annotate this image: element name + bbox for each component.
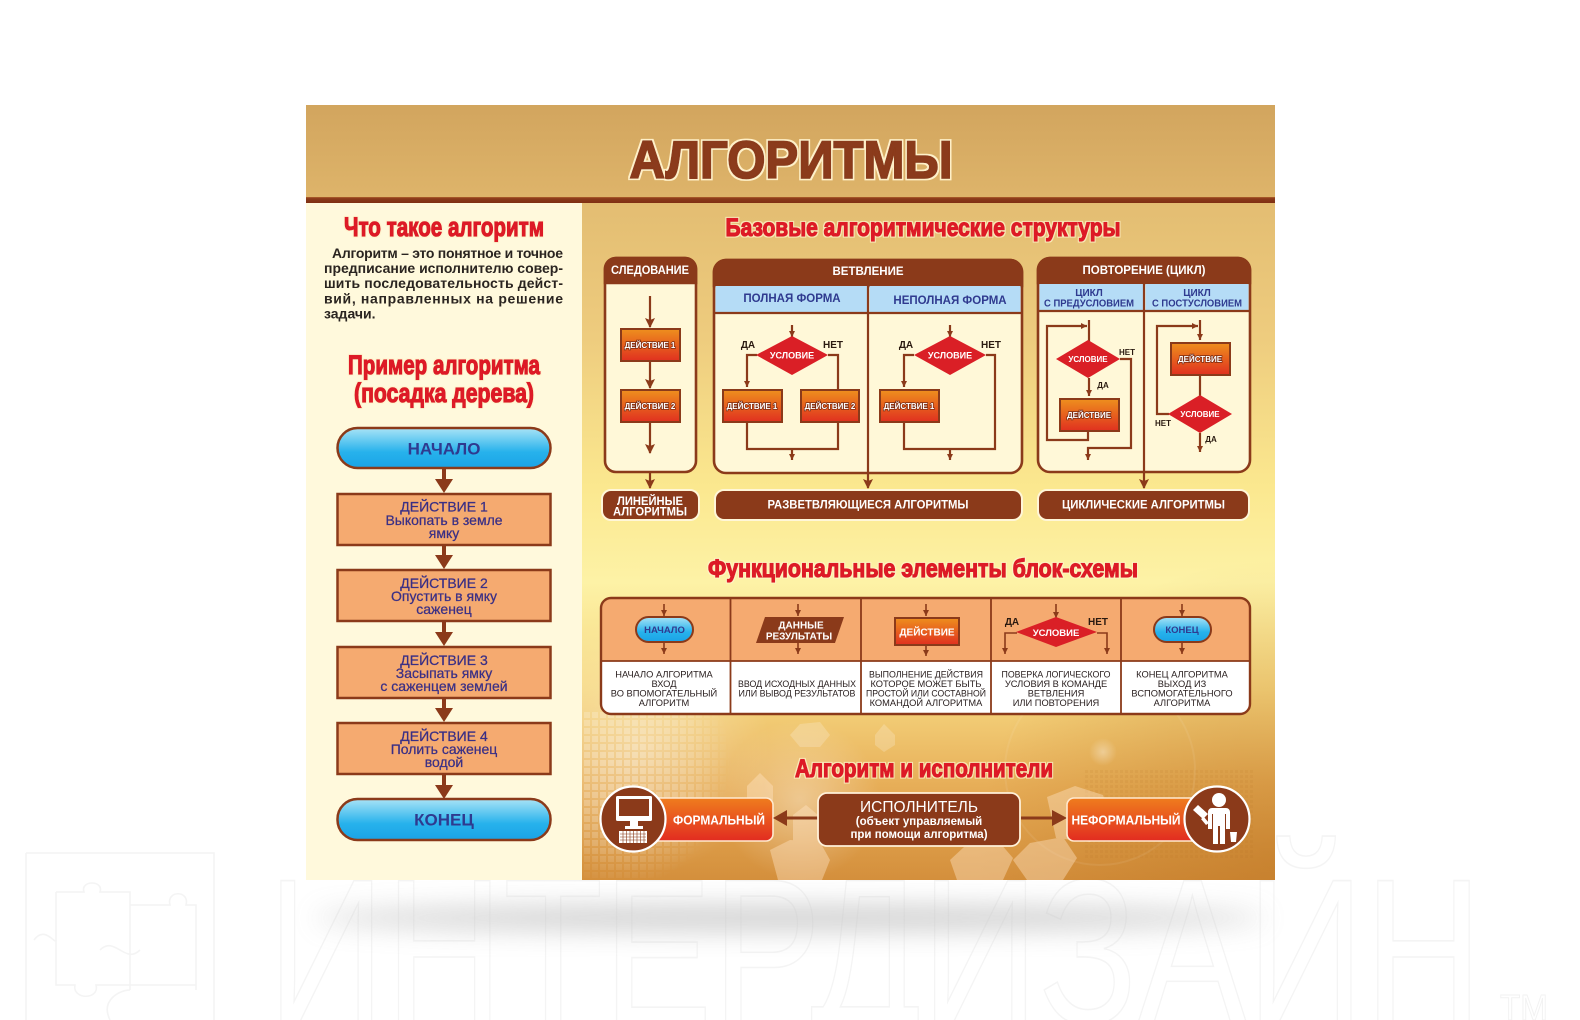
element: condition: ИЛИ ПОВТОРЕНИЯ xyxy=(1013,698,1099,708)
heading: what is an algorithm: Что такое алгоритм xyxy=(344,212,544,242)
label: cyclic algorithms: ЦИКЛИЧЕСКИЕ АЛГОРИТМЫ xyxy=(1062,498,1225,512)
definition text xyxy=(324,245,563,322)
shadow under poster xyxy=(315,905,1265,931)
title: АЛГОРИТМЫ xyxy=(630,131,952,190)
definition text: шить последовательность дейст- xyxy=(324,275,563,291)
partial form column: ДЕЙСТВИЕ 1 xyxy=(884,402,935,411)
informal executor: НЕФОРМАЛЬНЫЙ xyxy=(1072,812,1180,828)
arrow: to formal xyxy=(773,810,818,826)
step 3: Засыпать ямку xyxy=(396,665,492,681)
element: start: АЛГОРИТМ xyxy=(639,698,689,708)
step 3 xyxy=(338,647,550,698)
definition text: предписание исполнителю совер- xyxy=(324,260,563,276)
step 4: Полить саженец xyxy=(391,741,497,757)
icon: computer xyxy=(616,796,652,843)
step 2: Опустить в ямку xyxy=(391,588,497,604)
panel: sequence xyxy=(605,258,696,472)
end terminator xyxy=(338,799,550,840)
pre-condition loop: С ПРЕДУСЛОВИЕМ xyxy=(1044,298,1134,310)
element: action: ПРОСТОЙ ИЛИ СОСТАВНОЙ xyxy=(866,688,986,698)
element: start: НАЧАЛО АЛГОРИТМА xyxy=(615,670,714,680)
pre-condition loop: УСЛОВИЕ xyxy=(1068,355,1108,364)
full form column xyxy=(716,286,868,460)
element: data: РЕЗУЛЬТАТЫ xyxy=(766,632,832,642)
definition text: задачи. xyxy=(324,306,376,322)
heading: basic structures: Базовые алгоритмические структуры xyxy=(726,214,1120,242)
arrow: to informal xyxy=(1021,810,1067,826)
element: condition: УСЛОВИЕ xyxy=(1033,628,1079,639)
header stripe xyxy=(306,197,1275,203)
element: condition: ВЕТВЛЕНИЯ xyxy=(1028,688,1084,698)
partial form column: УСЛОВИЕ xyxy=(928,350,972,360)
pre-condition loop xyxy=(1040,284,1144,460)
step 2: саженец xyxy=(416,601,472,617)
element: data xyxy=(738,604,856,698)
step 2: ДЕЙСТВИЕ 2 xyxy=(400,574,488,591)
panel: repetition: ПОВТОРЕНИЕ (ЦИКЛ) xyxy=(1083,265,1206,277)
element: action: КОМАНДОЙ АЛГОРИТМА xyxy=(870,697,983,708)
panel: branching: ВЕТВЛЕНИЕ xyxy=(832,266,904,278)
watermark: puzzle logo xyxy=(26,853,214,1020)
post-condition loop: ДА xyxy=(1205,435,1217,444)
arrow: sequence to linear xyxy=(649,472,651,488)
executor box: при помощи алгоритма) xyxy=(850,829,988,841)
start terminator: НАЧАЛО xyxy=(408,440,480,458)
label: branching algorithms: РАЗВЕТВЛЯЮЩИЕСЯ АЛГОРИТМЫ xyxy=(768,498,968,512)
element: action: КОТОРОЕ МОЖЕТ БЫТЬ xyxy=(871,679,981,689)
element: end: АЛГОРИТМА xyxy=(1154,698,1211,708)
partial form column: НЕПОЛНАЯ ФОРМА xyxy=(893,295,1007,307)
step 1: ДЕЙСТВИЕ 1 xyxy=(400,498,488,514)
label: branching algorithms xyxy=(715,490,1022,520)
element: end: КОНЕЦ АЛГОРИТМА xyxy=(1136,670,1229,680)
executor box: (объект управляемый xyxy=(856,816,982,828)
element: action xyxy=(866,604,986,708)
full form column: НЕТ xyxy=(823,340,843,351)
panel: sequence: ДЕЙСТВИЕ 1 xyxy=(625,341,676,350)
pre-condition loop: ДЕЙСТВИЕ xyxy=(1067,411,1112,420)
post-condition loop: УСЛОВИЕ xyxy=(1180,410,1220,419)
element: condition: ДА xyxy=(1005,617,1019,628)
step 4: водой xyxy=(425,754,463,770)
step 3: с саженцем землей xyxy=(380,678,508,694)
element: end: КОНЕЦ xyxy=(1165,625,1199,636)
start terminator xyxy=(338,428,550,468)
full form column: ДА xyxy=(741,340,755,351)
heading: example algorithm xyxy=(348,350,541,408)
label: linear algorithms: ЛИНЕЙНЫЕ xyxy=(617,493,683,508)
element: condition: ПОВЕРКА ЛОГИЧЕСКОГО xyxy=(1002,670,1110,680)
definition text: вий, направленных на решение xyxy=(324,290,563,306)
post-condition loop: ДЕЙСТВИЕ xyxy=(1178,355,1223,364)
panel: repetition xyxy=(1038,258,1250,472)
post-condition loop: С ПОСТУСЛОВИЕМ xyxy=(1152,298,1242,310)
partial form column: ДА xyxy=(899,340,913,351)
full form column: УСЛОВИЕ xyxy=(770,350,814,360)
step 1: ямку xyxy=(429,525,459,541)
arrow: repetition to cyclic algorithms xyxy=(1143,284,1145,488)
element: start: ВХОД xyxy=(651,679,677,689)
table: functional elements xyxy=(601,598,1250,714)
executor box xyxy=(818,793,1020,846)
step 3: ДЕЙСТВИЕ 3 xyxy=(400,651,488,668)
element: condition: НЕТ xyxy=(1088,617,1108,628)
heading: example algorithm: Пример алгоритма xyxy=(348,350,541,380)
element: end: ВЫХОД ИЗ xyxy=(1158,679,1207,689)
flowchart: planting a tree xyxy=(338,428,550,840)
full form column: ДЕЙСТВИЕ 1 xyxy=(727,402,778,411)
step 4 xyxy=(338,723,550,774)
end terminator: КОНЕЦ xyxy=(414,810,474,830)
partial form column xyxy=(870,286,1020,460)
panel: branching xyxy=(714,260,1022,473)
element: start: НАЧАЛО xyxy=(644,625,685,636)
icon: person with tools xyxy=(1193,793,1237,844)
element: data: ИЛИ ВЫВОД РЕЗУЛЬТАТОВ xyxy=(738,688,856,698)
element: action: ДЕЙСТВИЕ xyxy=(899,626,955,638)
step 4: ДЕЙСТВИЕ 4 xyxy=(400,727,488,744)
formal executor: ФОРМАЛЬНЫЙ xyxy=(673,812,765,828)
informal executor xyxy=(1067,786,1250,852)
pre-condition loop: ЦИКЛ xyxy=(1075,288,1103,299)
formal executor xyxy=(600,786,773,852)
element: end xyxy=(1131,604,1233,708)
definition text: Алгоритм – это понятное и точное xyxy=(332,245,563,261)
full form column: ПОЛНАЯ ФОРМА xyxy=(743,293,841,305)
element: action: ВЫПОЛНЕНИЕ ДЕЙСТВИЯ xyxy=(869,668,983,680)
label: linear algorithms xyxy=(602,490,699,520)
heading: algorithm and executors: Алгоритм и исполнители xyxy=(795,755,1053,783)
pre-condition loop: ДА xyxy=(1097,381,1109,390)
element: start xyxy=(611,604,717,708)
step 1: Выкопать в земле xyxy=(385,512,503,528)
panel: sequence: СЛЕДОВАНИЕ xyxy=(611,265,689,277)
poster right panel background xyxy=(510,203,1275,880)
post-condition loop: ЦИКЛ xyxy=(1183,288,1211,299)
step 2 xyxy=(338,570,550,621)
element: end: ВСПОМОГАТЕЛЬНОГО xyxy=(1131,688,1233,698)
post-condition loop xyxy=(1146,284,1248,452)
element: condition xyxy=(1002,604,1110,708)
label: linear algorithms: АЛГОРИТМЫ xyxy=(613,504,687,518)
label: cyclic algorithms xyxy=(1038,490,1249,520)
panel: sequence: ДЕЙСТВИЕ 2 xyxy=(625,402,676,411)
arrow: branching to branched algorithms xyxy=(867,286,869,488)
heading: example algorithm: (посадка дерева) xyxy=(354,378,534,408)
full form column: ДЕЙСТВИЕ 2 xyxy=(805,402,856,411)
executor box: ИСПОЛНИТЕЛЬ xyxy=(860,799,978,816)
step 1 xyxy=(338,494,550,545)
pre-condition loop: НЕТ xyxy=(1119,348,1135,357)
element: start: ВО ВПОМОГАТЕЛЬНЫЙ xyxy=(611,688,717,698)
partial form column: НЕТ xyxy=(981,340,1001,351)
heading: functional elements: Функциональные элементы блок-схемы xyxy=(708,555,1138,583)
post-condition loop: НЕТ xyxy=(1155,419,1171,428)
header band xyxy=(306,105,1275,197)
element: condition: УСЛОВИЯ В КОМАНДЕ xyxy=(1005,679,1107,689)
poster left panel background xyxy=(306,203,582,880)
element: data: ВВОД ИСХОДНЫХ ДАННЫХ xyxy=(738,679,856,689)
flow arrows xyxy=(435,468,453,799)
element: data: ДАННЫЕ xyxy=(778,620,824,632)
